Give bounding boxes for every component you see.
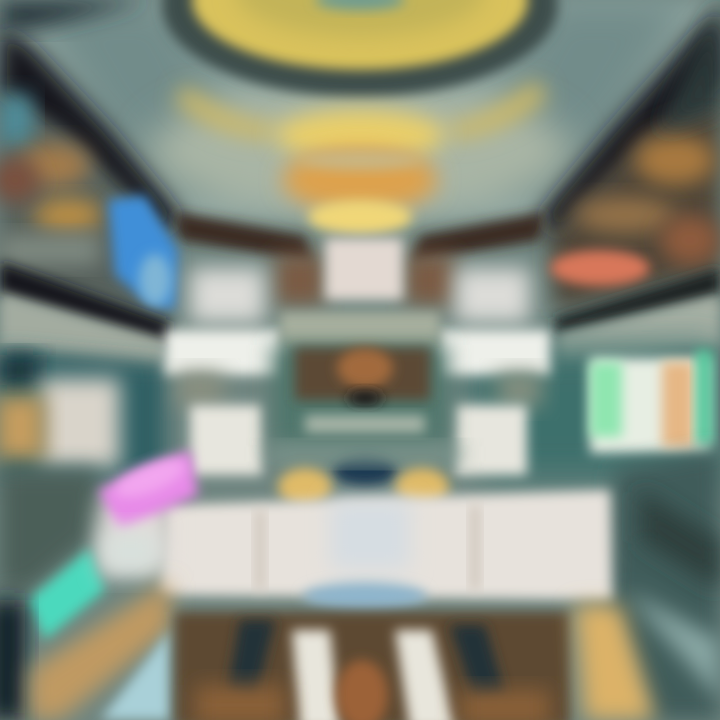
blue screen <box>108 195 178 310</box>
left white column <box>165 268 283 475</box>
lower left corner <box>0 580 170 720</box>
right middle sign <box>470 345 720 480</box>
dark and grey floor bands <box>0 262 720 365</box>
right white column <box>437 268 550 475</box>
right lower wall <box>610 450 720 720</box>
lower hall <box>175 612 570 720</box>
cyan sign <box>28 530 160 640</box>
ceiling <box>0 0 720 240</box>
gold lamps <box>278 468 449 506</box>
dome <box>162 0 558 97</box>
gold ceiling band and chandelier <box>175 80 548 234</box>
left upper shops <box>0 95 170 320</box>
upper brown ledge <box>175 212 545 305</box>
central balcony <box>270 312 460 486</box>
white balustrade <box>100 490 612 610</box>
right upper shops <box>550 0 720 310</box>
pink sign <box>98 450 198 530</box>
left middle shops <box>0 350 165 590</box>
lower right gold pillar <box>575 605 655 720</box>
